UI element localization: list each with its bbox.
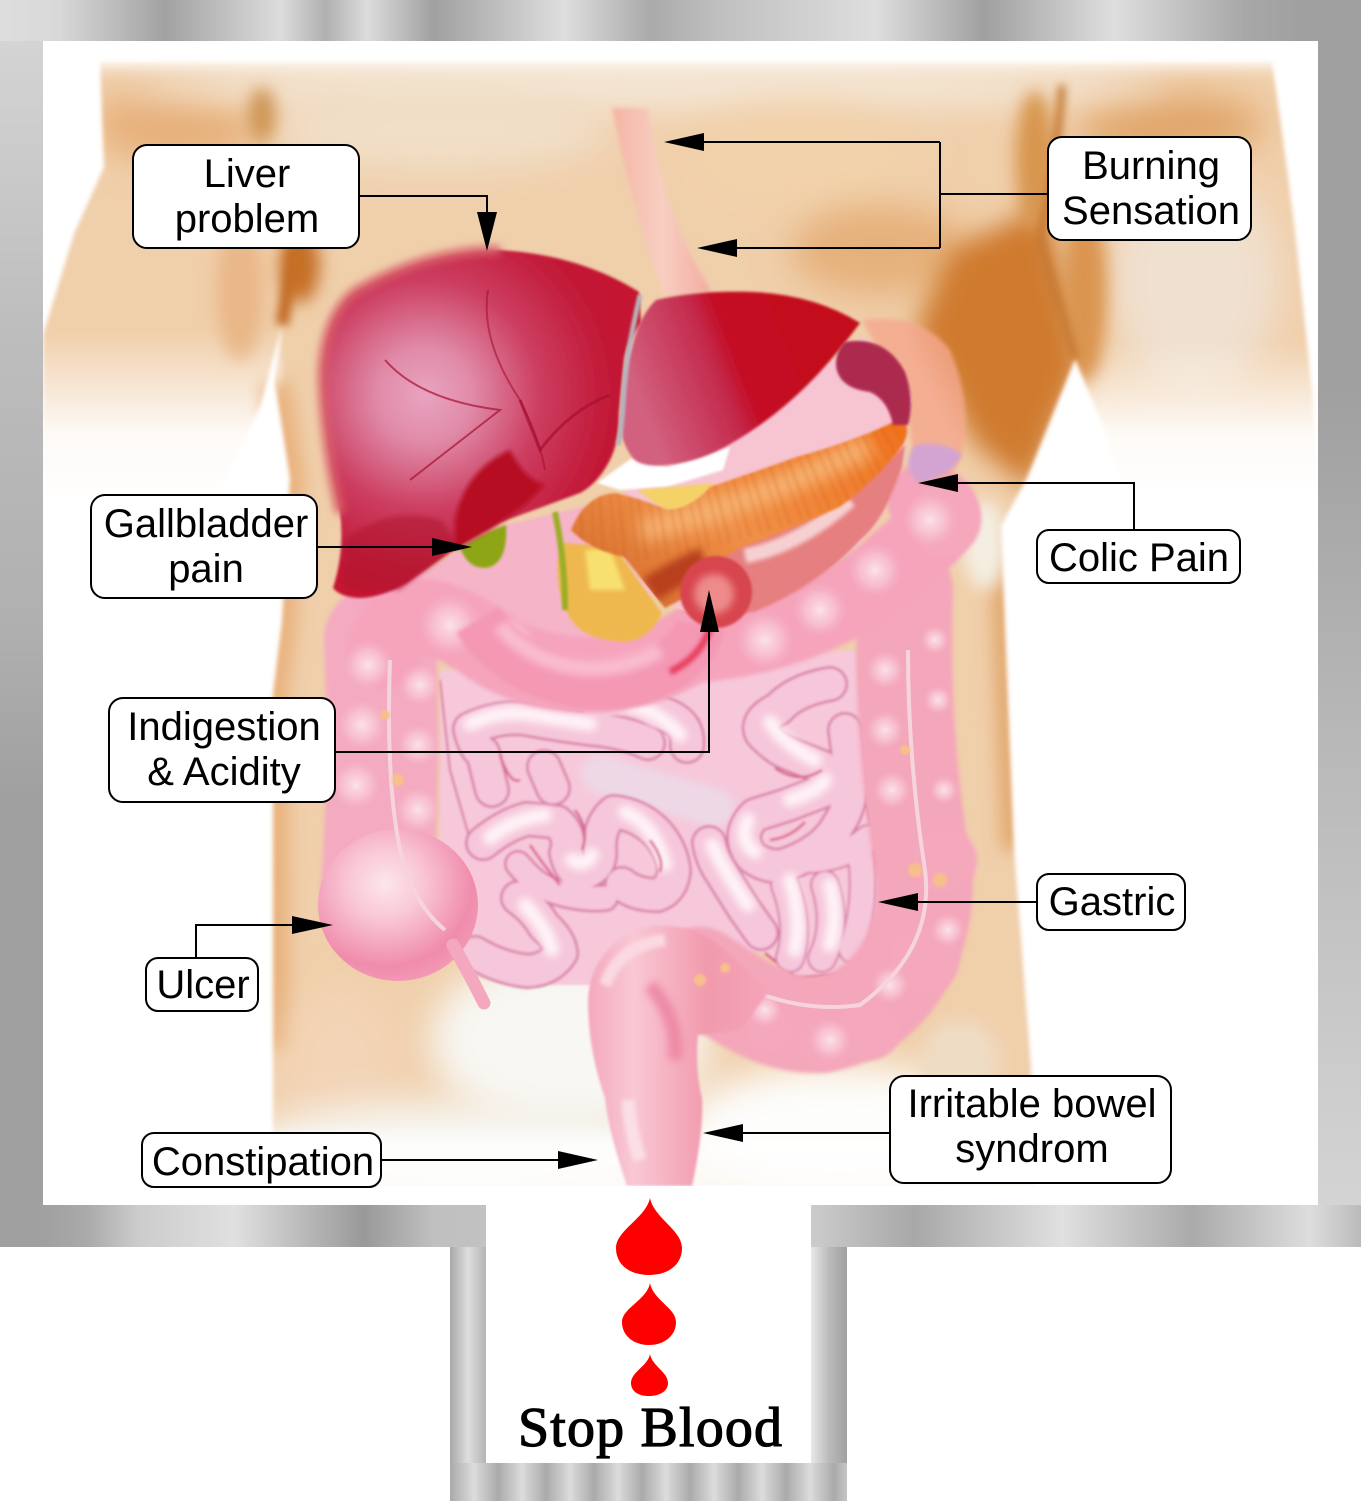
callout: Indigestion and Acidity: & Acidity <box>147 750 301 794</box>
arrow: Indigestion and Acidity <box>335 590 719 752</box>
fat specks <box>380 710 947 986</box>
callout: Burning Sensation: Burning <box>1082 144 1220 188</box>
bile duct <box>555 512 565 610</box>
callout: Gastric <box>1037 874 1185 930</box>
arrow: Liver problem <box>359 196 497 251</box>
arrow: Gastric <box>878 893 1037 911</box>
arrow: Colic Pain <box>918 474 1134 530</box>
callout: Gallbladder pain: Gallbladder <box>104 502 308 546</box>
appendix <box>453 945 484 1003</box>
torso skin <box>43 40 1320 1200</box>
arrow: Gallbladder pain <box>317 538 472 556</box>
pylorus <box>680 556 752 628</box>
pancreas head <box>558 543 662 642</box>
liver right lobe <box>322 250 641 598</box>
callout: Liver problem: Liver <box>204 152 290 196</box>
purple tail <box>908 444 962 483</box>
spleen crescent <box>836 341 911 425</box>
callout: Indigestion and Acidity <box>109 698 335 802</box>
spleen outer translucent zone <box>862 319 966 484</box>
esophagus <box>612 108 712 296</box>
large intestine <box>318 484 981 1186</box>
callout: Gallbladder pain: pain <box>168 547 244 591</box>
mesentery cells <box>600 774 715 808</box>
scalloped outer bulges <box>822 504 984 1073</box>
icon: small blood drop <box>631 1354 668 1396</box>
stomach <box>600 337 912 618</box>
callout: Burning Sensation: Sensation <box>1062 189 1240 233</box>
arrows: Burning Sensation <box>664 133 1048 257</box>
callout: Gallbladder pain <box>91 495 317 598</box>
callout: Ulcer: Ulcer <box>156 963 250 1007</box>
haustra <box>330 492 966 1062</box>
pancreas top fat <box>637 483 715 510</box>
pink backdrop behind upper organs <box>414 506 594 638</box>
colon bands <box>389 650 926 1007</box>
arrow: Ulcer <box>196 916 333 958</box>
callout: Irritable bowel syndrom: syndrom <box>955 1127 1109 1171</box>
heading: Stop Blood: Stop Blood <box>518 1397 782 1459</box>
pancreas <box>571 418 907 608</box>
stomach lower red band <box>724 445 906 614</box>
cecum <box>318 829 478 981</box>
arrow: Constipation <box>381 1151 598 1169</box>
callout: Gastric: Gastric <box>1049 880 1175 924</box>
callout: Burning Sensation <box>1048 137 1251 240</box>
callout: Constipation: Constipation <box>152 1140 374 1184</box>
illustration: torso and digestive organs <box>43 40 1320 1200</box>
callout: Ulcer <box>146 958 258 1011</box>
callout: Indigestion and Acidity: Indigestion <box>127 705 321 749</box>
callout: Liver problem <box>133 145 359 248</box>
icon: medium blood drop <box>622 1283 676 1345</box>
callout: Irritable bowel syndrom <box>890 1076 1171 1183</box>
icon: large blood drop <box>616 1198 682 1275</box>
callout: Colic Pain: Colic Pain <box>1049 536 1229 580</box>
liver fissure <box>618 295 640 445</box>
gallbladder <box>460 525 506 568</box>
liver left lobe <box>621 292 860 466</box>
arrow: Irritable bowel syndrom <box>703 1124 890 1142</box>
small intestine <box>440 650 882 985</box>
callout: Liver problem: problem <box>175 197 319 241</box>
sigmoid colon and rectum <box>588 926 770 1186</box>
transverse colon arch <box>478 620 700 684</box>
callout: Irritable bowel syndrom: Irritable bowel <box>907 1082 1157 1126</box>
white gap <box>597 447 730 490</box>
